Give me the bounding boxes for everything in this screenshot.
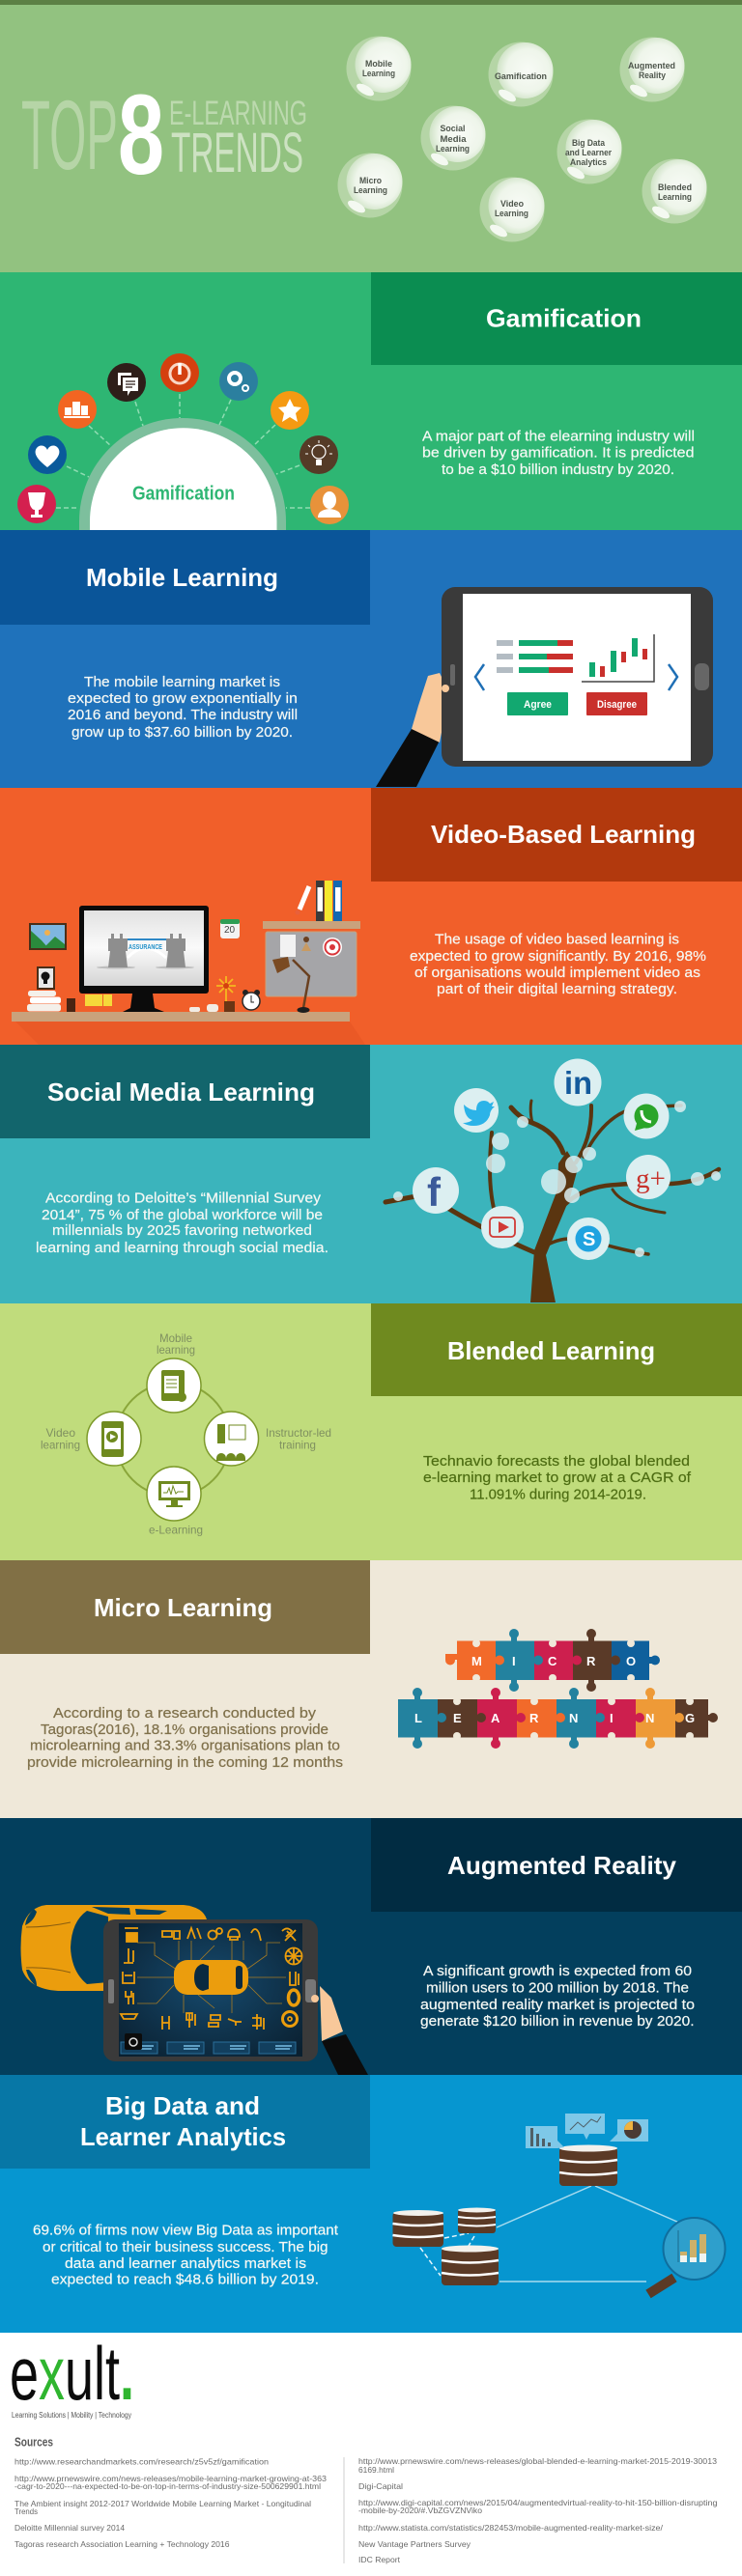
panel: augmented reality	[0, 1818, 742, 2075]
heading: micro learning	[0, 1560, 370, 1654]
heading: social media learning	[0, 1045, 370, 1138]
logo: exult: Learning Solutions | Mobility | Technology	[12, 2411, 131, 2420]
text: video learning body: part of their digital learning strategy.	[437, 982, 677, 997]
text: augmented reality body: augmented reality market is projected to	[420, 1998, 695, 2013]
bubble: video learning: Learning	[495, 209, 528, 219]
illustration: social media tree	[385, 1058, 721, 1302]
diagram: blended learning cycle	[41, 1331, 331, 1537]
icon: light bulb	[300, 435, 338, 474]
bubble: micro learning: Learning	[354, 185, 387, 196]
title	[21, 71, 307, 199]
title: 8	[118, 71, 164, 199]
panel: social media learning	[0, 1045, 742, 1303]
text: video learning body	[410, 933, 706, 997]
text: blended learning body: e-learning market to grow at a CAGR of	[423, 1470, 692, 1486]
sources: left column: Trends	[14, 2506, 38, 2516]
heading: sources: Sources	[14, 2435, 53, 2449]
illustration: puzzle word learning: N	[645, 1711, 654, 1725]
icon: trophy	[17, 485, 56, 523]
bubble: augmented reality: Reality	[639, 70, 667, 81]
panel: footer	[0, 2331, 742, 2576]
bubble: blended learning	[642, 158, 707, 224]
bubble: big data: Analytics	[570, 157, 607, 168]
diagram: database network	[392, 2114, 725, 2294]
sources: right column	[358, 2456, 718, 2564]
text: big data body: 69.6% of firms now view Big Data as important	[33, 2223, 338, 2238]
sources: left column: Deloitte Millennial survey 2014	[14, 2523, 125, 2533]
diagram: gamification hub	[17, 353, 349, 530]
title: E-LEARNING	[169, 95, 307, 132]
text: mobile learning body	[68, 675, 298, 741]
illustration: desk with monitor	[12, 881, 365, 1045]
bubble: gamification: Gamification	[495, 71, 547, 82]
callout: bar chart	[526, 2126, 564, 2148]
title: TOP	[21, 80, 118, 190]
icon: facebook: f	[427, 1169, 442, 1215]
bubble: social media learning: Social	[441, 124, 466, 134]
text: blended learning body: 11.091% during 2014-2019.	[470, 1487, 646, 1502]
callout: pie chart	[610, 2119, 648, 2142]
text: social media body: learning and learning through social media.	[36, 1241, 328, 1256]
panel: mobile learning	[0, 530, 742, 788]
tree	[385, 1101, 719, 1302]
icon: linkedin: in	[564, 1065, 592, 1101]
sources: right column: IDC Report	[358, 2555, 401, 2564]
heading: gamification: Gamification	[486, 303, 642, 332]
node: mobile learning: Mobile	[159, 1331, 192, 1345]
node: video learning: learning	[41, 1439, 80, 1452]
illustration: puzzle word micro: R	[586, 1654, 596, 1668]
icon: user	[310, 486, 349, 524]
text: social media body	[36, 1191, 328, 1256]
illustration: puzzle word learning	[398, 1688, 718, 1749]
bubble: gamification	[489, 42, 553, 106]
text: social media body: According to Deloitte’s “Millennial Survey	[45, 1191, 322, 1207]
bubble: micro learning	[338, 153, 402, 218]
text: gamification body: be driven by gamification. It is predicted	[422, 446, 694, 462]
illustration: puzzle word learning: A	[491, 1711, 500, 1725]
bubble: mobile learning: Mobile	[365, 59, 392, 70]
sources: left column: http://www.prnewswire.com/news-releases/mobile-learning-market-growing-at-363	[14, 2474, 327, 2483]
bubble: mobile learning	[346, 37, 412, 100]
bubble: augmented reality	[620, 37, 684, 102]
bubble: video learning	[479, 178, 545, 241]
panel: micro learning	[0, 1560, 742, 1818]
bubble: big data	[556, 120, 622, 183]
panel: video-based learning	[0, 788, 742, 1045]
bubble: big data: and Learner	[565, 148, 612, 158]
button: agree	[507, 692, 568, 715]
text: gamification body	[422, 429, 695, 478]
icon: skype: S	[583, 1229, 595, 1250]
panel: hero	[0, 0, 742, 272]
bubble: blended learning: Blended	[658, 182, 692, 193]
heading: social media learning: Social Media Learning	[47, 1078, 315, 1106]
panel: big data and learner analytics	[0, 2075, 742, 2333]
bubble: mobile learning: Learning	[362, 69, 395, 79]
bubble: social media learning: Media	[441, 134, 467, 145]
text: micro learning body: According to a research conducted by	[53, 1706, 317, 1722]
icon: car	[21, 1905, 207, 1991]
bubble: big data: Big Data	[572, 138, 606, 149]
sources: left column: http://www.researchandmarkets.com/research/z5v5zf/gamification	[14, 2456, 269, 2466]
heading: blended learning: Blended Learning	[447, 1336, 655, 1365]
node: instructor-led training	[205, 1412, 331, 1466]
illustration: puzzle word learning: I	[610, 1711, 614, 1725]
text: social media body: millennials by 2025 favoring networked	[52, 1223, 312, 1239]
heading: blended learning	[371, 1303, 742, 1396]
button: agree: Agree	[524, 699, 552, 711]
bubble: video learning: Video	[500, 199, 524, 210]
heading: augmented reality: Augmented Reality	[447, 1851, 677, 1880]
icon: youtube	[481, 1206, 524, 1248]
button: disagree	[586, 692, 647, 715]
text: mobile learning body: 2016 and beyond. The industry will	[68, 708, 298, 723]
illustration: puzzle word learning: N	[569, 1711, 578, 1725]
illustration: puzzle word learning: E	[453, 1711, 462, 1725]
icon: calendar	[220, 919, 240, 938]
icon: facebook	[413, 1167, 459, 1215]
node: video learning	[41, 1412, 141, 1466]
icon: pin board with lamp	[266, 932, 357, 1013]
illustration: puzzle word learning: G	[685, 1711, 695, 1725]
heading: big data	[0, 2075, 370, 2169]
icon: portrait frame	[37, 966, 55, 990]
tree blossoms	[393, 1101, 721, 1257]
sources: left column: The Ambient insight 2012-2017 Worldwide Mobile Learning Market - Longitudinal	[14, 2499, 311, 2508]
sources: right column: http://www.statista.com/statistics/282453/mobile-augmented-reality-market-size/	[358, 2523, 664, 2533]
illustration: car and tablet	[21, 1905, 368, 2075]
icon: chat	[107, 363, 146, 402]
logo: exult: exult.	[10, 2331, 134, 2416]
node: e-learning: e-Learning	[149, 1524, 203, 1537]
heading: augmented reality	[371, 1818, 742, 1912]
icon: book stack	[27, 991, 61, 1012]
bubble: augmented reality: Augmented	[628, 61, 675, 71]
node: mobile learning: learning	[157, 1343, 195, 1357]
chart: candlesticks	[582, 634, 654, 682]
text: mobile learning body: expected to grow exponentially in	[68, 691, 298, 707]
bubble: micro learning: Micro	[359, 176, 382, 186]
node: video learning: Video	[46, 1426, 75, 1440]
heading: mobile learning: Mobile Learning	[86, 563, 278, 592]
icon: magnifier	[648, 2218, 725, 2294]
icon: google plus: g+	[636, 1163, 666, 1194]
illustration: puzzle word micro: O	[626, 1654, 636, 1668]
illustration: puzzle word learning: L	[414, 1711, 422, 1725]
illustration: puzzle word micro: C	[548, 1654, 557, 1668]
icon: skype	[567, 1218, 610, 1260]
bubble: social media learning	[421, 106, 485, 170]
icon: monitor: ASSURANCE	[128, 944, 162, 951]
panel: blended learning	[0, 1303, 742, 1560]
text: mobile learning body: grow up to $37.60 billion by 2020.	[71, 725, 293, 741]
icon: database top	[559, 2145, 617, 2186]
diagram: gamification hub: Gamification	[132, 483, 235, 504]
title: TRENDS	[171, 122, 303, 184]
node: e-learning	[147, 1467, 203, 1537]
sources: left column	[14, 2456, 327, 2549]
icon: monitor	[79, 906, 209, 1012]
icon: linkedin	[555, 1058, 601, 1106]
icon: landscape picture	[29, 923, 67, 950]
sources: right column: http://www.prnewswire.com/news-releases/global-blended-e-learning-market-2015-2019-30013	[358, 2456, 717, 2466]
node: instructor-led training: Instructor-led	[266, 1426, 331, 1440]
text: big data body	[33, 2223, 338, 2288]
button: disagree: Disagree	[597, 699, 637, 711]
heading: micro learning: Micro Learning	[94, 1593, 272, 1622]
illustration: puzzle word micro: I	[512, 1654, 516, 1668]
panel: gamification	[0, 272, 742, 530]
text: big data body: expected to reach $48.6 billion by 2019.	[51, 2273, 319, 2288]
bubble: blended learning: Learning	[658, 192, 692, 203]
text: micro learning body: provide microlearning in the coming 12 months	[27, 1755, 343, 1771]
heading: big data: Big Data and	[105, 2091, 260, 2120]
heading: mobile learning	[0, 530, 370, 625]
icon: power	[160, 353, 199, 392]
icon: database left	[392, 2210, 443, 2247]
callout: line chart	[565, 2114, 605, 2140]
text: augmented reality body	[420, 1964, 695, 2030]
text: gamification body: A major part of the elearning industry will	[422, 429, 695, 444]
text: micro learning body: microlearning and 33.3% organisations plan to	[30, 1738, 340, 1753]
illustration: puzzle word micro: M	[471, 1654, 482, 1668]
icon: star	[271, 391, 309, 430]
text: gamification body: to be a $10 billion industry by 2020.	[442, 462, 674, 478]
icon: small car	[174, 1960, 248, 1995]
chart: opinion bars	[497, 640, 573, 673]
text: video learning body: of organisations would implement video as	[414, 966, 700, 981]
icon: clock	[243, 990, 260, 1010]
icon: gears	[219, 362, 258, 401]
icon: calendar: 20	[224, 925, 236, 936]
icon: podium	[58, 390, 97, 429]
node: mobile learning	[147, 1331, 201, 1413]
circuit lines	[137, 1941, 286, 2013]
auto service icons	[121, 1928, 301, 2030]
text: micro learning body	[27, 1706, 343, 1771]
sources: right column: http://www.digi-capital.com/news/2015/04/augmentedvirtual-reality-to-hit-150-billion-disrupting	[358, 2498, 718, 2507]
icon: google plus	[626, 1155, 671, 1199]
icon: database small	[458, 2207, 496, 2233]
illustration: puzzle word learning: R	[529, 1711, 539, 1725]
sources: left column: -cagr-to-2020---na-expected-to-be-on-top-in-terms-of-industry-size-500629901.html	[14, 2481, 321, 2491]
illustration: tablet with hand	[376, 587, 713, 787]
text: big data body: data and learner analytics market is	[65, 2256, 306, 2272]
text: video learning body: expected to grow significantly. By 2016, 98%	[410, 949, 706, 965]
text: blended learning body	[423, 1454, 692, 1502]
text: augmented reality body: A significant growth is expected from 60	[423, 1964, 692, 1979]
sources: right column: -mobile-by-2020/#.VbZGVZNViko	[358, 2506, 482, 2515]
icon: heart	[28, 435, 67, 474]
text: augmented reality body: million users to 200 million by 2018. The	[426, 1981, 689, 1997]
node: instructor-led training: training	[279, 1439, 316, 1452]
text: social media body: 2014”, 75 % of the global workforce will be	[42, 1208, 323, 1223]
text: video learning body: The usage of video based learning is	[435, 933, 679, 948]
icon: tablet	[103, 1919, 319, 2061]
sources: right column: New Vantage Partners Survey	[358, 2539, 471, 2549]
thumbnails	[121, 2042, 296, 2054]
text: blended learning body: Technavio forecasts the global blended	[423, 1454, 690, 1470]
icon: flower	[216, 976, 236, 1012]
text: micro learning body: Tagoras(2016), 18.1% organisations provide	[41, 1722, 328, 1738]
heading: video-based learning: Video-Based Learning	[431, 820, 696, 849]
icon: database bottom	[442, 2246, 499, 2285]
heading: gamification	[371, 272, 742, 365]
icon: twitter	[454, 1088, 499, 1133]
icon: whatsapp	[624, 1093, 669, 1139]
heading: video-based learning	[371, 788, 742, 882]
bubble: social media learning: Learning	[436, 144, 470, 154]
illustration: puzzle word micro	[445, 1629, 660, 1692]
sources: right column: 6169.html	[358, 2465, 394, 2475]
heading: big data: Learner Analytics	[80, 2122, 286, 2151]
sources: left column: Tagoras research Association Learning + Technology 2016	[14, 2539, 230, 2549]
text: big data body: or critical to their business success. The big	[43, 2240, 328, 2255]
icon: wall shelf with binders	[263, 881, 360, 929]
text: mobile learning body: The mobile learning market is	[84, 675, 280, 690]
sources: right column: Digi-Capital	[358, 2481, 403, 2491]
text: augmented reality body: generate $120 billion in revenue by 2020.	[420, 2014, 694, 2030]
